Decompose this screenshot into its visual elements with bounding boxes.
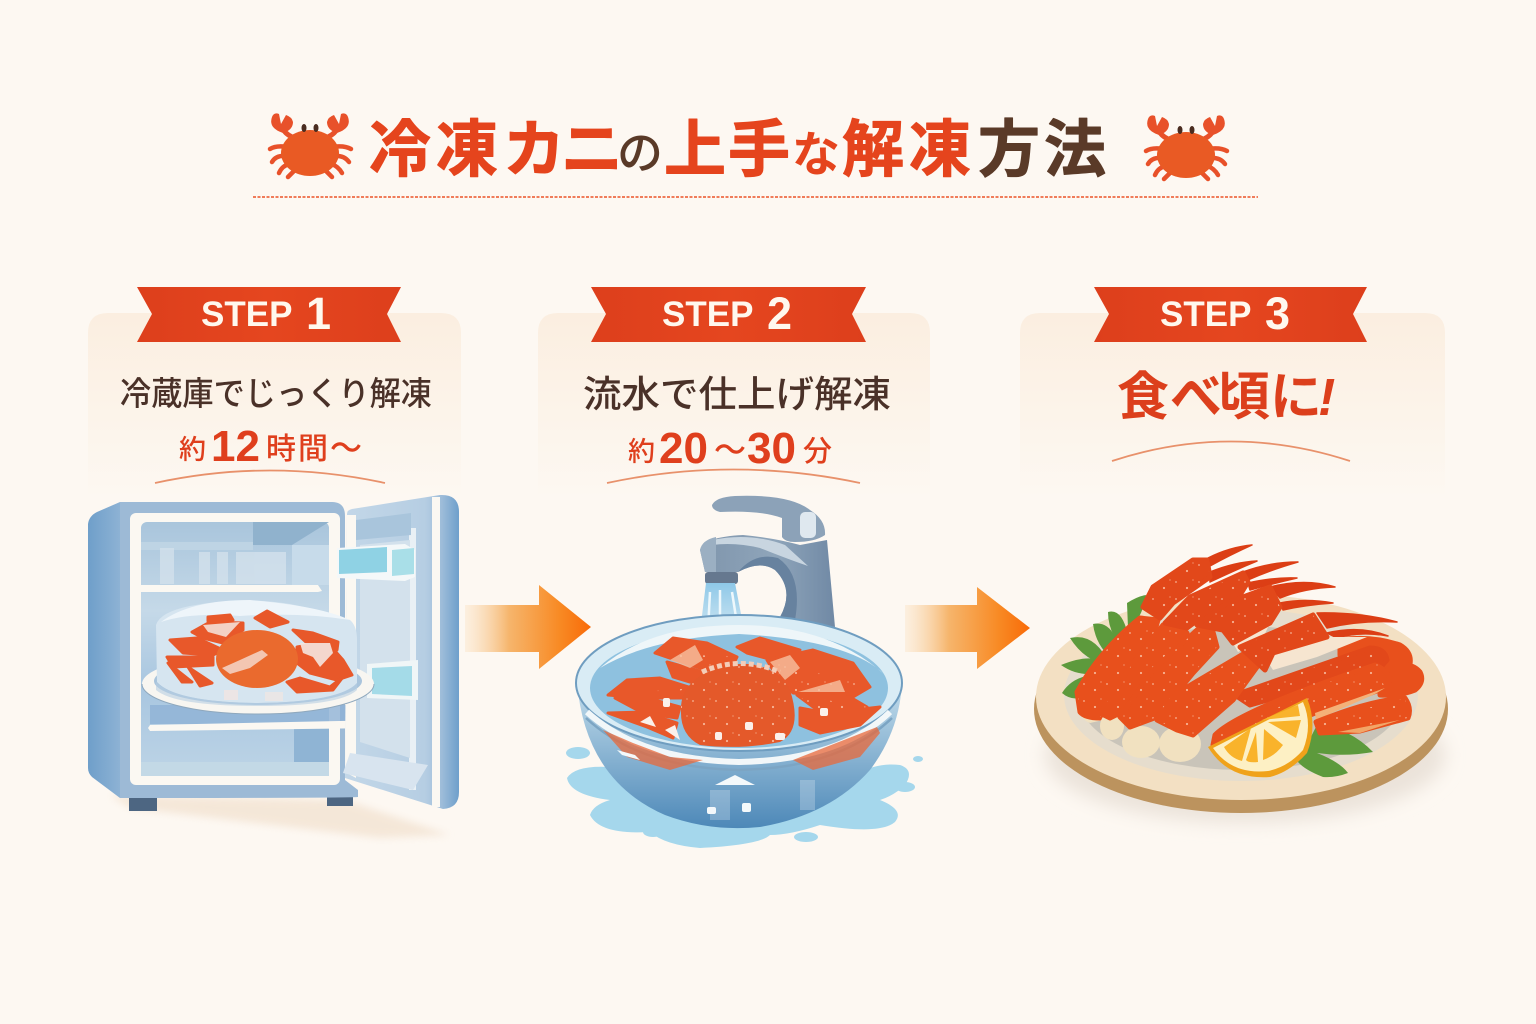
step 2 time: 30 [747, 424, 796, 473]
ribbon: step 3: 3 [1265, 288, 1290, 339]
ice chunks [617, 750, 815, 820]
faucet [700, 496, 835, 627]
crabs in bowl [608, 638, 880, 747]
leg 4 [1157, 613, 1397, 762]
leg 2 [1100, 562, 1298, 740]
water stream [699, 583, 746, 640]
step 3 description: 食べ頃に [1117, 369, 1322, 427]
illustration: plate of crab legs [1034, 545, 1448, 823]
icon: crab left [270, 113, 351, 177]
step 2 time: 約 [628, 437, 655, 467]
step 1 time: 時間 [266, 433, 328, 466]
step 1 description: 冷蔵庫でじっくり解凍 [120, 375, 432, 412]
garnish leaves [1061, 595, 1373, 777]
panel: step 2 header [538, 287, 930, 500]
upper shelf [141, 585, 322, 592]
ribbon: step 2: 2 [767, 288, 792, 339]
step 2 time: 〜 [714, 432, 746, 468]
step 3 underline [1112, 442, 1350, 461]
bowl body [577, 682, 902, 828]
panel background [538, 313, 930, 500]
arrow: step 1 to step 2 [465, 585, 591, 669]
panel: step 3 header [1020, 287, 1445, 500]
ribbon: step 3 [1094, 287, 1367, 342]
bowl rim and water [576, 615, 902, 751]
panel: step 1 header [88, 287, 461, 500]
step 2 time: 20 [659, 424, 708, 473]
interior [141, 522, 329, 776]
heading text: カニ [503, 116, 623, 185]
step 1 underline [155, 470, 385, 483]
heading text: 上手 [664, 116, 790, 185]
lower crab legs [1213, 638, 1422, 745]
step 1 time: 〜 [330, 430, 362, 466]
upper door bin [337, 544, 415, 581]
arrow: step 2 to step 3 [905, 587, 1030, 669]
step 2 underline [607, 470, 860, 483]
white frame [130, 513, 340, 785]
middle door bin [367, 660, 418, 700]
step 1 time: 12 [211, 422, 260, 471]
ribbon: step 1 [137, 287, 401, 342]
panel background [1020, 313, 1445, 500]
ribbon: step 2: STEP [662, 295, 753, 334]
icon: crab right [1146, 115, 1227, 179]
panel background [88, 313, 461, 500]
open door [337, 495, 459, 809]
plate shadow [1045, 687, 1445, 823]
leg 3 [1120, 582, 1335, 758]
step 2 description: 流水で仕上げ解凍 [583, 374, 891, 415]
heading text: の [617, 127, 663, 179]
heading text: 冷凍 [369, 116, 498, 185]
lemon wedge [1208, 698, 1312, 777]
illustration: bowl under running faucet [566, 496, 923, 848]
illustration: refrigerator with frozen crab [88, 495, 459, 838]
ribbon: step 3: STEP [1160, 295, 1251, 334]
water puddle [566, 747, 923, 848]
step 1 time: 約 [179, 435, 206, 465]
faucet handle [712, 496, 825, 542]
leg 1 [1077, 545, 1257, 723]
plate [142, 654, 374, 714]
heading text: 解凍 [842, 116, 971, 185]
step 3 description: ! [1318, 369, 1335, 427]
step 2 time: 分 [803, 436, 832, 468]
lower shelf [148, 705, 387, 731]
bowl front rim [586, 712, 892, 770]
lower door bin [343, 753, 428, 790]
ribbon: step 1: STEP [201, 295, 292, 334]
crab seen through glass [603, 727, 880, 770]
frozen crab in ice [156, 600, 357, 706]
ribbon: step 1: 1 [306, 288, 331, 339]
heading text: な [792, 129, 840, 182]
fridge side [88, 502, 120, 798]
floor shadow [110, 795, 450, 838]
fridge body [120, 502, 358, 798]
ribbon: step 2 [591, 287, 866, 342]
heading text: 方法 [978, 116, 1106, 185]
wooden plate [1034, 594, 1448, 813]
fridge feet [129, 794, 353, 811]
title block [270, 113, 1227, 185]
